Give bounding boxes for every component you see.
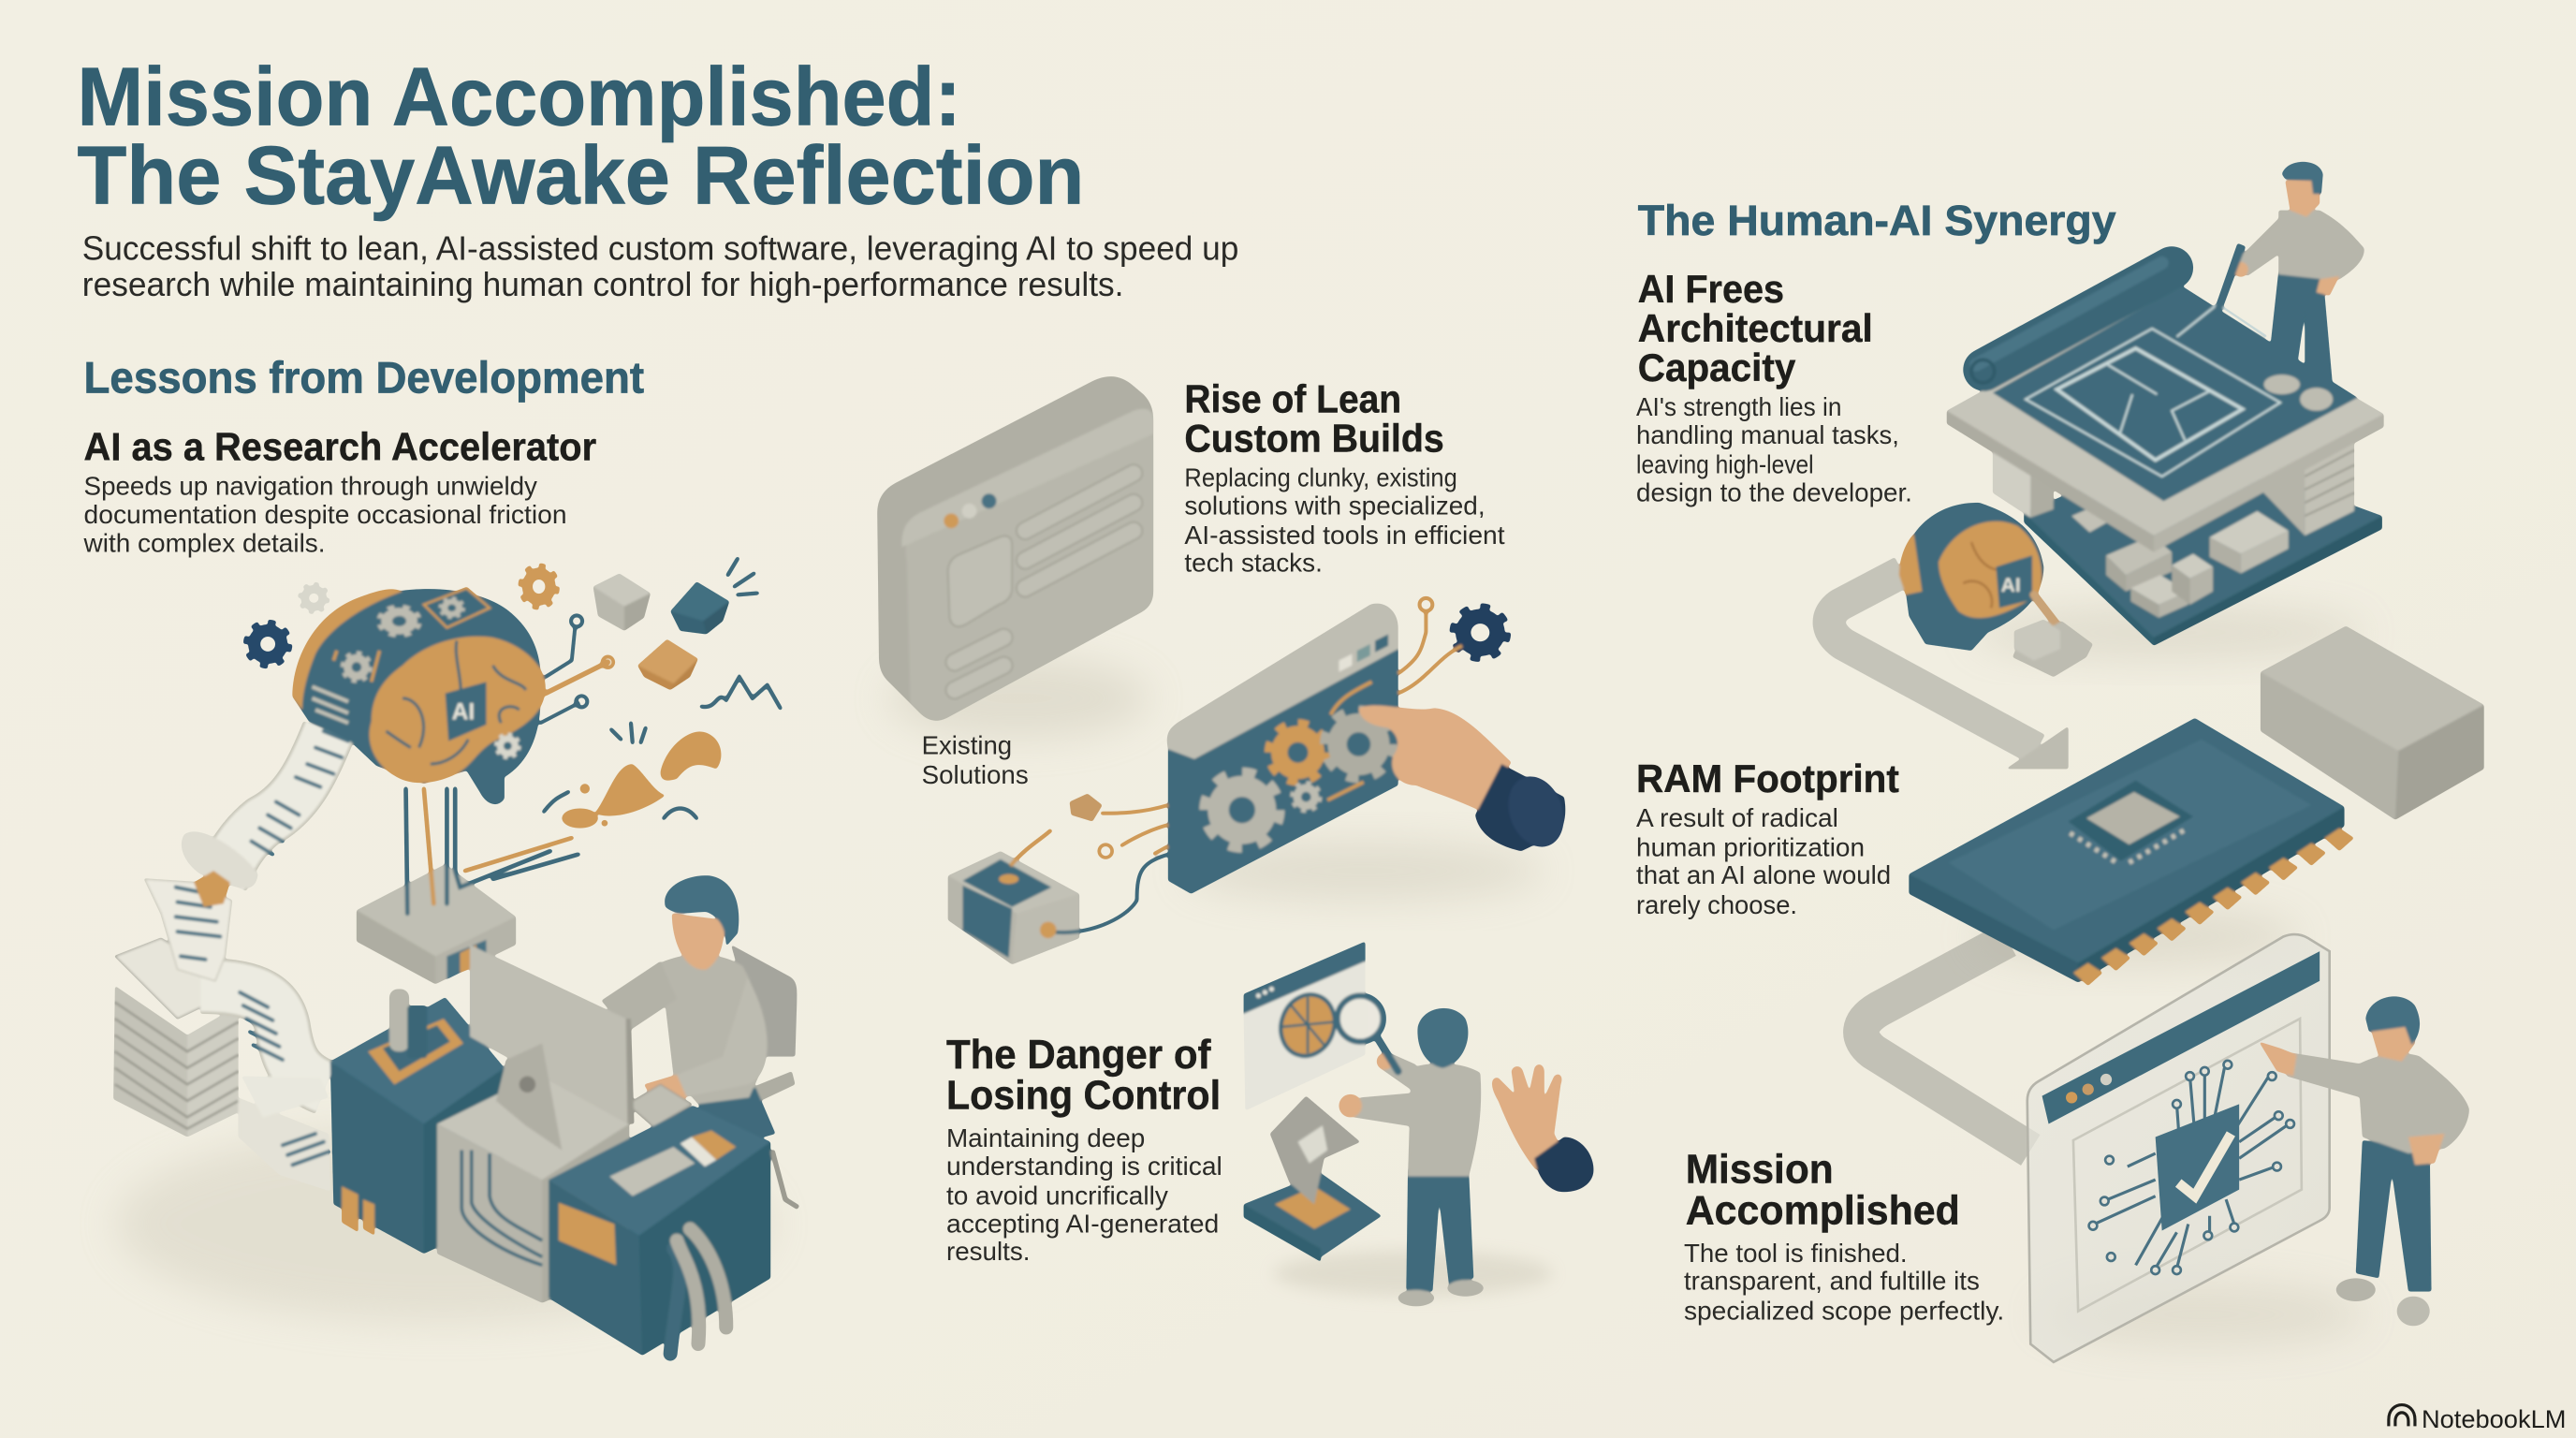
icon: computer monitor bbox=[470, 945, 634, 1151]
wires under brain bbox=[406, 788, 578, 914]
paper ribbon from documents into brain bbox=[200, 731, 329, 1088]
icon: paper stack bbox=[113, 938, 242, 1137]
text block: rise of lean custom builds: AI-assisted tools in efficient bbox=[1184, 521, 1505, 550]
icon: floating cubes bbox=[593, 574, 729, 690]
text block: the danger of losing control: The Danger of bbox=[946, 1032, 1211, 1078]
shadow bbox=[1183, 842, 1544, 901]
illustration: blueprint platform with architect and AI helper bbox=[1829, 162, 2384, 769]
icon: paper roll with orange clip bbox=[182, 831, 258, 907]
text block: RAM footprint: rarely choose. bbox=[1636, 890, 1797, 919]
icon: teal base with paper blocks bbox=[2024, 431, 2382, 646]
text block: mission accomplished: The tool is finished. bbox=[1684, 1239, 1908, 1268]
text block: the danger of losing control: Maintaining deep bbox=[946, 1123, 1145, 1152]
text block: the danger of losing control: accepting AI-generated bbox=[946, 1209, 1219, 1238]
illustration: transparent finished tool bbox=[2027, 934, 2469, 1362]
window dots bbox=[944, 493, 996, 528]
arrow: blueprint to RAM bbox=[1829, 572, 2069, 769]
logo: NotebookLM: NotebookLM bbox=[2422, 1404, 2566, 1433]
shadow bbox=[1971, 907, 2300, 966]
title bbox=[78, 51, 1084, 222]
illustration: RAM board bbox=[1909, 718, 2354, 986]
icon: lower floor ribbon bbox=[239, 1077, 330, 1191]
text block: the danger of losing control: Losing Control bbox=[946, 1073, 1221, 1119]
icon: stop hand with cuff bbox=[1492, 1064, 1593, 1192]
text block: the danger of losing control: to avoid uncrifically bbox=[946, 1181, 1168, 1210]
icon: chair bbox=[723, 945, 798, 1208]
subtitle: Successful shift to lean, AI-assisted custom software, leveraging AI to speed up bbox=[82, 228, 1238, 267]
text block: rise of lean custom builds: Custom Builds bbox=[1184, 417, 1444, 461]
icon: browser window with brain bbox=[1244, 942, 1365, 1110]
blueprint artwork bbox=[1829, 162, 2384, 769]
text block: rise of lean custom builds: Rise of Lean bbox=[1184, 377, 1401, 421]
icon: stand with crumpled object bbox=[1244, 1096, 1382, 1262]
text block: the danger of losing control: understanding is critical bbox=[946, 1152, 1222, 1181]
subtitle: research while maintaining human control for high-performance results. bbox=[82, 265, 1123, 303]
board bbox=[1909, 718, 2344, 983]
text block: AI frees architectural capacity: Capacity bbox=[1638, 345, 1796, 389]
icon: inspecting person bbox=[1339, 1008, 1484, 1306]
icon: person at computer bbox=[601, 875, 775, 1153]
custom build artwork bbox=[948, 598, 1573, 964]
label: existing solutions: Solutions bbox=[922, 760, 1029, 789]
text block: AI frees architectural capacity: AI's strength lies in bbox=[1636, 392, 1841, 421]
title: Mission Accomplished: bbox=[78, 51, 961, 142]
window content blocks bbox=[948, 473, 1134, 690]
RAM artwork bbox=[1909, 718, 2354, 986]
icon: pedestal bbox=[357, 864, 516, 984]
text block: RAM footprint: that an AI alone would bbox=[1636, 860, 1891, 889]
shadow bbox=[1971, 607, 2365, 659]
text block: RAM footprint: RAM Footprint bbox=[1636, 756, 1899, 800]
desk scene artwork bbox=[113, 559, 798, 1356]
icon: blueprint sheet bbox=[1971, 263, 2358, 501]
text block: AI as a research accelerator: with complex details. bbox=[83, 529, 326, 558]
arrow: RAM to finished tool bbox=[1861, 940, 2030, 1151]
text block: rise of lean custom builds: solutions with specialized, bbox=[1184, 491, 1486, 520]
illustration: existing solutions window bbox=[877, 376, 1153, 740]
circuit chip with check bbox=[2089, 1061, 2294, 1274]
text block: rise of lean custom builds bbox=[1184, 377, 1505, 578]
heading: lessons from development: Lessons from Development bbox=[84, 353, 644, 403]
icon: pointing person bbox=[2259, 996, 2469, 1326]
shadow bbox=[2037, 1282, 2365, 1347]
text block: AI frees architectural capacity: leaving high-level bbox=[1636, 449, 1814, 478]
icon: keyboard bbox=[627, 1084, 692, 1127]
text block: mission accomplished: specialized scope perfectly. bbox=[1684, 1296, 2004, 1325]
icon: NotebookLM mark bbox=[2389, 1405, 2415, 1426]
subtitle bbox=[82, 228, 1238, 303]
window artwork bbox=[877, 376, 1153, 721]
text block: mission accomplished: Accomplished bbox=[1686, 1187, 1960, 1233]
title: The StayAwake Reflection bbox=[78, 130, 1084, 222]
icon: middle grey cabinet bbox=[437, 1075, 629, 1303]
window body bbox=[877, 376, 1153, 721]
icon: grey slab with pillar bbox=[1947, 287, 2384, 552]
ground shadow bbox=[115, 1125, 772, 1323]
icon: orange clay blobs bbox=[562, 731, 721, 829]
text block: AI as a research accelerator bbox=[83, 424, 596, 558]
icon: ribbon text lines bbox=[240, 731, 348, 1165]
text block: mission accomplished bbox=[1684, 1147, 2004, 1325]
illustration: AI research accelerator desk scene bbox=[113, 559, 798, 1356]
text block: RAM footprint: A result of radical bbox=[1636, 803, 1838, 832]
text block: AI frees architectural capacity: AI Frees bbox=[1638, 267, 1784, 311]
text block: mission accomplished: transparent, and fultille its bbox=[1684, 1267, 1980, 1296]
gears bbox=[1206, 608, 1507, 847]
illustration: person inspecting AI output bbox=[1244, 942, 1593, 1306]
text block: AI frees architectural capacity bbox=[1636, 267, 1912, 506]
text block: AI frees architectural capacity: handling manual tasks, bbox=[1636, 420, 1899, 449]
icon: gears around brain bbox=[247, 566, 557, 666]
circuit traces to the right of brain bbox=[540, 615, 614, 723]
memory contacts bbox=[2073, 829, 2354, 986]
icon: squiggle marks bbox=[544, 559, 781, 818]
label: existing solutions bbox=[922, 731, 1029, 789]
text block: RAM footprint: human prioritization bbox=[1636, 832, 1865, 861]
label: existing solutions: Existing bbox=[922, 731, 1012, 760]
icon: hand touching gear bbox=[1358, 705, 1573, 855]
text block: AI frees architectural capacity: design to the developer. bbox=[1636, 477, 1912, 506]
icon: magnifying glass bbox=[1338, 996, 1398, 1071]
illustration: custom build window with hand bbox=[948, 598, 1573, 964]
text block: AI frees architectural capacity: Architectural bbox=[1638, 306, 1873, 350]
icon: architect with pencil bbox=[2215, 162, 2364, 411]
text block: rise of lean custom builds: Replacing clunky, existing bbox=[1184, 462, 1457, 492]
icon: AI brain helper bbox=[1899, 503, 2093, 677]
text block: AI as a research accelerator: Speeds up navigation through unwieldy bbox=[84, 471, 537, 500]
icon: AI brain helper: AI bbox=[2001, 575, 2021, 596]
text block: rise of lean custom builds: tech stacks. bbox=[1184, 549, 1323, 578]
icon: small connector box bbox=[948, 794, 1168, 964]
icon: front teal cabinet bbox=[549, 1106, 770, 1356]
inspection artwork bbox=[1244, 942, 1593, 1306]
text block: mission accomplished: Mission bbox=[1686, 1147, 1834, 1193]
icon: left teal cabinet bbox=[330, 990, 505, 1254]
icon: brain bbox=[292, 588, 546, 804]
text block: the danger of losing control: results. bbox=[946, 1237, 1030, 1266]
window shadow bbox=[887, 657, 1150, 740]
glass panel bbox=[2027, 934, 2330, 1362]
shadow bbox=[1273, 1251, 1553, 1297]
icon: brain: AI bbox=[452, 700, 475, 726]
text block: the danger of losing control bbox=[946, 1032, 1222, 1266]
text block: RAM footprint bbox=[1636, 756, 1899, 919]
icon: grey memory block bbox=[2261, 626, 2484, 820]
text block: AI as a research accelerator: documentation despite occasional friction bbox=[84, 500, 567, 529]
traces bbox=[1101, 598, 1462, 855]
heading: the human-AI synergy: The Human-AI Synergy bbox=[1638, 197, 2116, 244]
custom window bbox=[1167, 604, 1398, 894]
icon: paper sheet bbox=[145, 879, 232, 981]
text block: AI as a research accelerator: AI as a Research Accelerator bbox=[84, 424, 596, 468]
